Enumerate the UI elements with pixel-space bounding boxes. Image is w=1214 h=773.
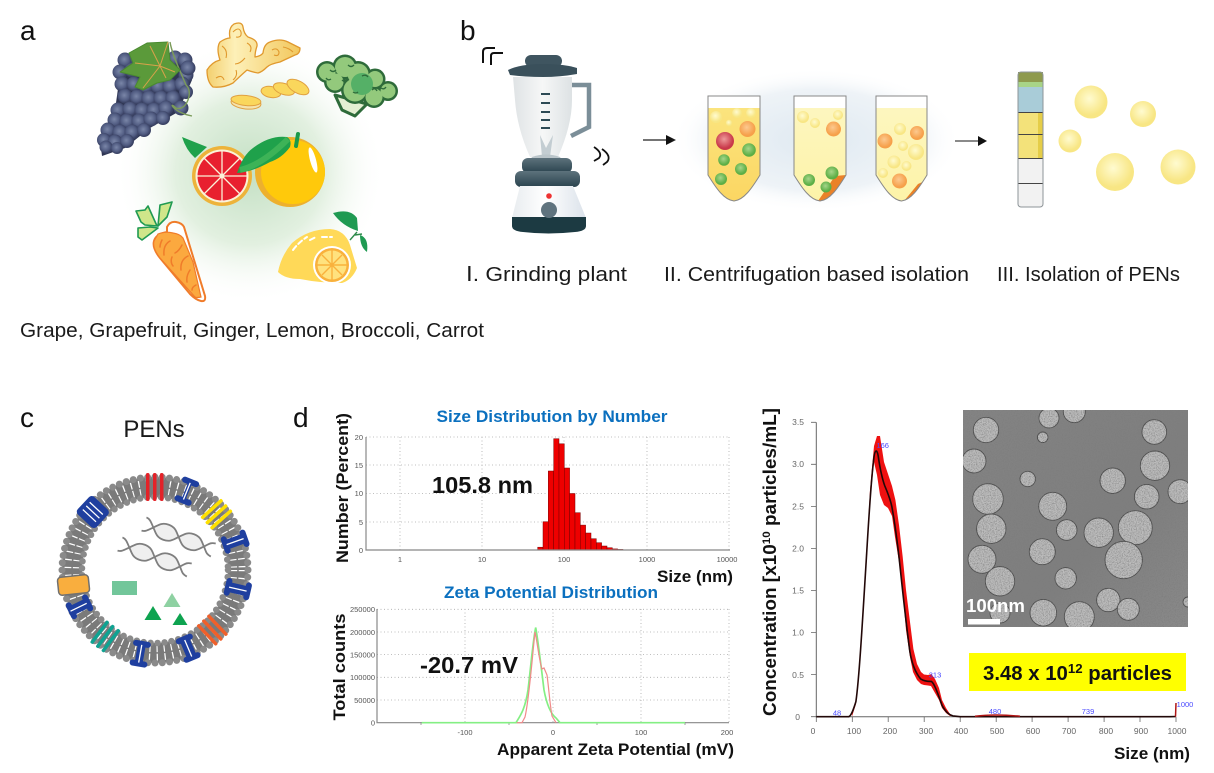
chart title: Zeta Potential Distribution (444, 584, 658, 602)
lipid bilayer ring (62, 477, 248, 663)
x tick labels: 800 (1099, 726, 1113, 736)
callout: particle count (969, 653, 1186, 691)
arrow (643, 135, 676, 145)
chart: zeta potential distribution (330, 584, 734, 759)
tube 2 (794, 96, 846, 202)
y axis title: 10 (761, 531, 773, 544)
y tick labels (350, 605, 375, 728)
peak labels: 48 (833, 708, 841, 718)
membrane proteins (57, 473, 253, 668)
y tick labels: 0 (371, 718, 375, 728)
callout: particle count: particles (1083, 663, 1172, 685)
x tick labels: 1000 (639, 555, 655, 564)
x tick labels (398, 555, 737, 564)
x tick labels: 10000 (717, 555, 737, 564)
y tick labels: 0 (795, 712, 800, 722)
x tick labels: 500 (990, 726, 1004, 736)
arrow (955, 136, 987, 146)
x tick labels: 100 (635, 728, 647, 737)
callout: particle count: 12 (1068, 661, 1083, 676)
y axis title: Total counts (330, 614, 349, 720)
value: zeta: -20.7 mV (420, 652, 519, 678)
y tick labels: 2.0 (792, 544, 804, 554)
x axis title: Apparent Zeta Potential (mV) (497, 740, 734, 759)
panel b: isolation workflow (460, 15, 1196, 286)
callout: particle count: 3.48 x 10 (983, 663, 1066, 685)
y tick labels: 1.0 (792, 628, 804, 638)
x tick labels: 100 (847, 726, 861, 736)
panel letter d: d (293, 402, 309, 433)
step III label: III. Isolation of PENs (997, 263, 1180, 286)
tube 3 (876, 96, 927, 202)
error band (852, 436, 953, 716)
y tick labels: 50000 (354, 696, 375, 705)
icon: grapes (97, 42, 196, 156)
cargo: protein rectangle (112, 581, 137, 595)
icon: ginger (207, 23, 311, 111)
peak labels (833, 441, 1193, 718)
icon: orange (237, 134, 325, 207)
y tick labels (355, 433, 363, 555)
peak labels: 739 (1082, 707, 1094, 716)
y tick labels: 3.5 (792, 417, 804, 427)
red curve (517, 632, 556, 723)
TEM micrograph (962, 401, 1193, 632)
y tick labels: 2.5 (792, 502, 804, 512)
peak labels: 480 (989, 707, 1001, 716)
y tick labels: 0 (359, 546, 363, 555)
y tick labels: 1.5 (792, 586, 804, 596)
blue glow (671, 68, 961, 212)
y tick labels: 10 (355, 489, 363, 498)
y tick labels: 100000 (350, 673, 375, 682)
chart: nanoparticle tracking concentration (760, 408, 1193, 763)
panel d: characterization (293, 401, 1193, 763)
gradient tube (1018, 72, 1043, 207)
x tick labels: 100 (558, 555, 570, 564)
icon: carrot (136, 202, 205, 301)
chart: size distribution by number (333, 408, 737, 586)
PENs heading: PENs (123, 416, 185, 443)
y tick labels: 3.0 (792, 459, 804, 469)
y axis title: Concentration [x10 (760, 553, 780, 716)
y tick labels: 0.5 (792, 670, 804, 680)
y tick labels: 200000 (350, 628, 375, 637)
cargo: nucleic acids (117, 517, 216, 578)
step II label: II. Centrifugation based isolation (664, 263, 969, 286)
peak labels: 1000 (1177, 700, 1193, 709)
green glow (115, 40, 385, 304)
x axis title: Size (nm) (1114, 744, 1190, 763)
panel letter c: c (20, 402, 34, 433)
green curve (422, 628, 685, 723)
panel letter a: a (20, 15, 36, 46)
size bars (538, 439, 623, 550)
y axis title: particles/mL] (760, 408, 780, 531)
peak labels: 166 (876, 441, 889, 450)
x tick labels: -100 (457, 728, 473, 737)
y tick labels: 5 (359, 518, 363, 527)
isolated nanoparticles (1058, 86, 1196, 191)
y axis title: Number (Percent) (333, 413, 352, 563)
x tick labels: 200 (883, 726, 897, 736)
x tick labels: 400 (954, 726, 968, 736)
x tick labels: 700 (1062, 726, 1076, 736)
x tick labels (811, 726, 1187, 736)
caption: plant list: Grape, Grapefruit, Ginger, Lemon, Broccoli, Carrot (20, 319, 484, 342)
icon: lemon (278, 211, 367, 284)
x tick labels: 200 (721, 728, 733, 737)
x tick labels: 300 (919, 726, 933, 736)
y tick labels: 20 (355, 433, 363, 442)
tube 1 (708, 96, 760, 202)
y tick labels (792, 417, 804, 722)
x tick labels: 600 (1026, 726, 1040, 736)
x tick labels: 10 (478, 555, 486, 564)
panel a: plant sources (20, 15, 484, 342)
chart title: Size Distribution by Number (436, 408, 668, 426)
panel letter b: b (460, 15, 476, 46)
x axis title: Size (nm) (657, 567, 733, 586)
x tick labels (457, 728, 733, 737)
scale bar (968, 619, 1000, 624)
icon: blender (483, 48, 609, 234)
x tick labels: 1000 (1168, 726, 1187, 736)
y tick labels: 150000 (350, 650, 375, 660)
icon: broccoli (316, 54, 398, 116)
step I label: Ⅰ. Grinding plant (466, 263, 627, 286)
mean curve (816, 451, 1176, 717)
icon: grapefruit (182, 137, 252, 206)
value: size: 105.8 nm (432, 472, 533, 498)
y tick labels: 250000 (350, 605, 375, 614)
cargo: triangles (144, 593, 188, 625)
scale label: 100nm (966, 596, 1025, 616)
y tick labels: 15 (355, 461, 363, 470)
x tick labels: 0 (811, 726, 816, 736)
x tick labels: 1 (398, 555, 402, 564)
x tick labels: 900 (1134, 726, 1148, 736)
peak labels: 313 (929, 670, 941, 680)
x tick labels: 0 (551, 728, 555, 737)
small peak and end spike (975, 703, 1176, 717)
panel c: PEN structure (20, 402, 253, 668)
